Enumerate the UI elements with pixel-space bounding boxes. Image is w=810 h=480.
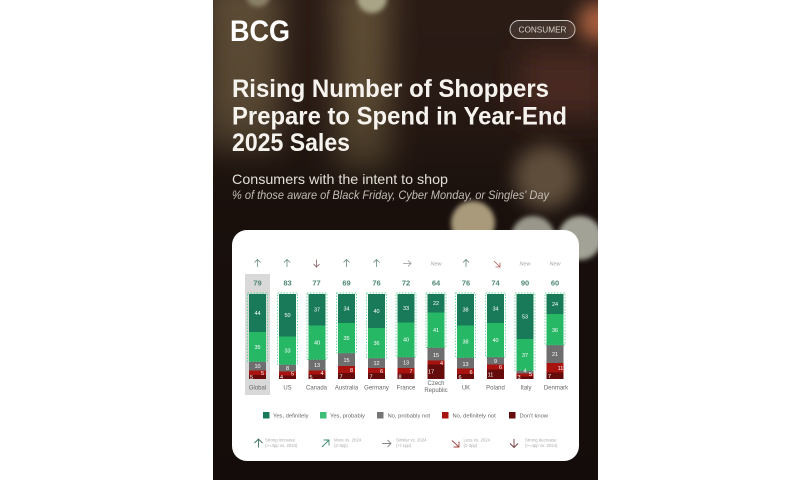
bar: US: 50 [284,313,291,319]
country labels: France [397,386,416,392]
legend: arrow key: Strong decrease [525,438,557,442]
totals row: 83 [283,278,292,288]
totals row: 69 [342,278,351,288]
bar: Poland: 6 [499,365,502,371]
panel: chart card: New [519,262,532,268]
bar: France: 13 [403,360,409,366]
legend: arrow key: (>=4pp vs. 2024) [525,443,558,448]
bar: Germany: 36 [373,341,380,347]
title: 2025 Sales [232,129,350,157]
legend: arrow key: (2-3pp) [464,443,478,448]
legend: arrow key: (+/-1pp) [396,443,412,448]
bar: Australia [336,293,356,380]
global highlight column [245,274,270,395]
bar: Czech Republic: 4 [440,361,443,367]
bar: France: 8 [398,374,402,380]
bar: Denmark [545,293,565,380]
bar: Italy: 37 [522,353,528,359]
bar: Global: 35 [254,345,261,351]
trend arrows row [254,260,500,267]
bar: Czech Republic: 15 [433,353,439,359]
bar: Italy: 5 [529,372,532,378]
legend: response categories: Don't know [520,413,549,419]
logo: BCG: BCG [230,15,290,48]
bar: Canada: 13 [314,363,320,369]
bar: Canada [307,293,327,381]
country labels: Global [249,386,266,392]
legend: arrow key: Similar vs. 2024 [396,438,427,442]
legend: arrow key: Less vs. 2024 [464,438,491,442]
bar: France [396,293,416,380]
legend: response categories: No, probably not [388,413,430,419]
country labels: Australia [335,386,359,392]
panel: chart card [232,230,579,461]
bar: UK: 6 [469,370,473,376]
totals row: 76 [462,278,470,288]
bar: Canada: 40 [314,340,320,346]
bar: Global: 44 [254,311,261,317]
totals row: 72 [402,278,410,288]
legend: response categories [263,412,549,419]
bar: Denmark: 7 [548,374,551,380]
bar: US: 8 [286,366,289,372]
country labels: Czech [427,381,445,387]
bar: Germany: 7 [369,374,373,380]
bar: Czech Republic: 22 [433,301,439,307]
bar: Denmark: 21 [552,352,558,358]
bar: Poland: 34 [492,306,499,312]
bar: Poland: 40 [492,338,499,344]
totals row: 74 [491,278,500,288]
bar: UK: 38 [462,340,469,346]
bar: US: 4 [280,375,283,381]
legend: arrow key: More vs. 2024 [334,438,362,442]
bar: Canada: 37 [314,308,320,314]
country labels: Germany [364,386,389,392]
title: Prepare to Spend in Year-End [232,102,567,130]
stacked bar chart [248,293,565,381]
tag: consumer: CONSUMER [518,24,566,34]
country labels: Denmark [544,386,569,392]
bar: Germany [366,293,386,380]
country labels [249,381,569,394]
bar: France: 7 [409,369,413,375]
bar: Australia: 35 [343,336,350,342]
bar: Australia: 8 [350,368,353,374]
totals row [253,278,559,288]
legend: response categories: No, definitely not [452,413,496,419]
bar: Czech Republic: 41 [433,328,439,334]
totals row: 77 [312,278,321,288]
bar: Poland: 11 [488,372,493,378]
legend: arrow key: (>=4pp vs. 2024) [265,443,298,448]
bar: Canada: 5 [309,375,313,381]
totals row: 76 [372,278,381,288]
country labels: Republic [424,388,448,394]
bar: Denmark: 36 [552,328,558,334]
title: Rising Number of Shoppers [232,75,549,103]
country labels: US [283,386,292,392]
bar: UK: 38 [462,308,469,314]
bar: UK: 13 [462,362,469,368]
panel: chart card: New [549,262,562,268]
bar: Czech Republic: 17 [428,370,434,376]
tag: consumer [510,20,575,38]
bar: Italy [515,293,535,381]
bar: Canada: 4 [320,371,324,377]
totals row: 90 [521,278,529,288]
subtitle note: % of those aware of Black Friday, Cyber Monday, or Singles' Day [232,190,550,202]
bar: Global: 5 [250,375,253,381]
bar: UK [456,293,476,381]
bar: Australia: 15 [343,358,350,364]
legend: arrow key: (2-3pp) [334,443,348,448]
bar: Denmark: 11 [558,366,563,372]
bar: Denmark: 24 [552,302,558,308]
background photo: blurred bokeh lights [205,0,618,480]
bar: Germany: 6 [380,369,383,375]
bar: Global [248,293,268,381]
totals row: 60 [551,278,559,288]
totals row: 64 [432,278,441,288]
bar: France: 33 [403,306,409,312]
bar: Germany: 12 [373,361,380,367]
panel: chart card: New [430,262,443,268]
bar: Italy: 53 [522,314,528,320]
bar: Global: 10 [254,364,261,370]
bar: Germany: 40 [373,309,380,315]
country labels: Poland [486,386,505,392]
country labels: Canada [306,386,328,392]
country labels: UK [462,386,470,392]
subtitle: Consumers with the intent to shop [232,171,448,187]
bar: Poland [486,293,506,379]
bar: US [278,293,298,381]
bar: Australia: 7 [339,374,343,380]
bar: Global: 5 [261,371,264,377]
legend: arrow key [254,438,558,448]
bar: US: 33 [284,348,291,354]
bar: UK: 6 [458,375,462,381]
legend: response categories: Yes, definitely [273,413,309,419]
bar: Australia: 34 [343,306,350,312]
bar: France: 40 [403,338,409,344]
bar: Czech Republic [426,293,446,379]
legend: response categories: Yes, probably [330,413,365,419]
country labels: Italy [520,386,532,392]
bar: Italy: 3 [517,375,521,381]
title [232,75,567,157]
bar: Poland: 9 [494,359,497,365]
bar: Italy: 4 [523,368,527,374]
bar: US: 5 [291,372,294,378]
totals row: 79 [253,278,262,288]
legend: arrow key: Strong increase [265,438,296,442]
